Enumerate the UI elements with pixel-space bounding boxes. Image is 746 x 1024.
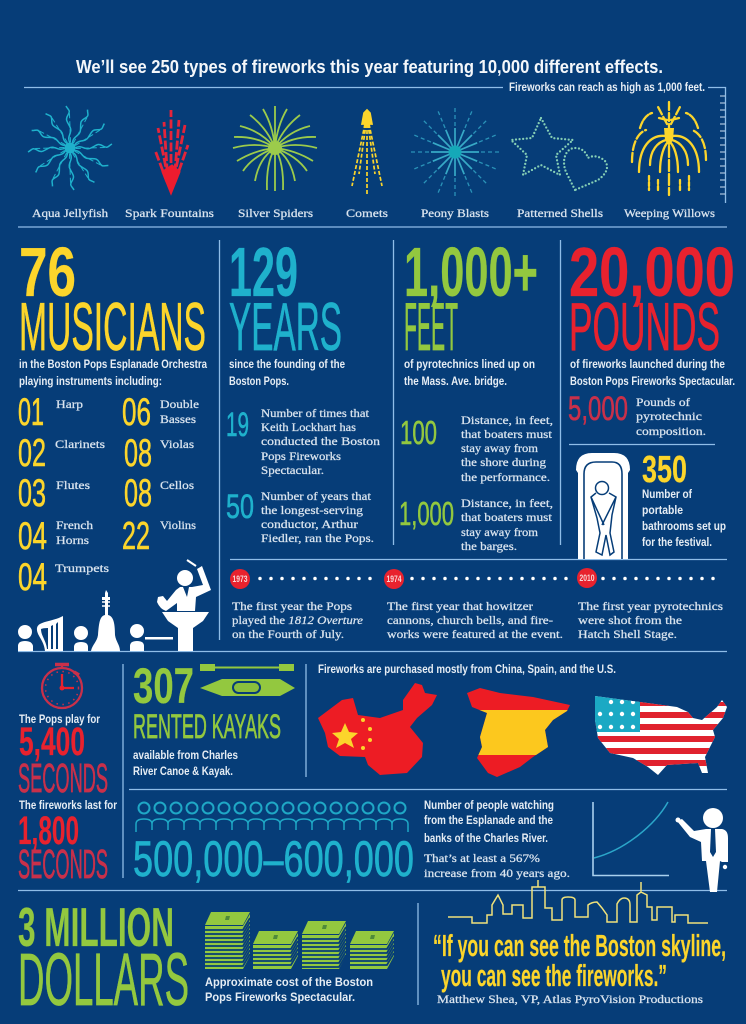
icon: spark fountain firework bbox=[155, 110, 188, 192]
height scale bbox=[24, 82, 726, 203]
instrument counts: 08 bbox=[124, 432, 152, 475]
panel: seconds: The Pops play for bbox=[19, 714, 100, 726]
panel: cost bbox=[18, 896, 394, 1021]
text: SECONDS bbox=[18, 841, 108, 887]
firework captions: Comets bbox=[346, 206, 388, 220]
panel: years: 19 bbox=[226, 406, 249, 444]
panel: feet: the barges. bbox=[461, 539, 517, 553]
icon: Boston skyline bbox=[448, 880, 708, 923]
instrument counts: 08 bbox=[124, 472, 152, 515]
instrument names: Cellos bbox=[160, 478, 194, 492]
map: USA bbox=[595, 696, 727, 775]
panel: musicians: 76 bbox=[19, 233, 76, 311]
panel: years: Boston Pops. bbox=[229, 376, 289, 388]
instrument counts: 02 bbox=[18, 432, 46, 475]
crowd description: That’s at least a 567% bbox=[424, 851, 540, 865]
panel: pounds: Number of bbox=[642, 489, 692, 501]
panel: seconds: The fireworks last for bbox=[19, 800, 117, 812]
panel: years: YEARS bbox=[229, 289, 342, 365]
instrument counts bbox=[18, 391, 152, 599]
panel: countries bbox=[318, 664, 730, 780]
firework captions: Silver Spiders bbox=[238, 206, 313, 220]
map: China bbox=[318, 683, 437, 775]
title: We’ll see 250 types of fireworks this year featuring 10,000 different effects. bbox=[76, 56, 663, 77]
panel: seconds bbox=[18, 664, 117, 887]
panel: pounds: 5,000 bbox=[568, 390, 628, 428]
instrument counts: 04 bbox=[18, 556, 47, 599]
panel: feet: stay away from bbox=[461, 441, 539, 455]
instrument names: Horns bbox=[56, 533, 89, 547]
panel: kayaks: River Canoe & Kayak. bbox=[133, 766, 233, 778]
instrument names: Violins bbox=[160, 518, 196, 532]
panel: cost: Pops Fireworks Spectacular. bbox=[205, 992, 355, 1004]
panel: years: 129 bbox=[229, 233, 298, 311]
icon: patterned shells firework bbox=[511, 118, 607, 190]
instrument counts: 01 bbox=[18, 391, 44, 434]
height scale: Fireworks can reach as high as 1,000 feet. bbox=[509, 82, 705, 94]
panel: years: Number of years that bbox=[261, 489, 372, 503]
panel: years: Spectacular. bbox=[261, 463, 324, 477]
panel: feet: 100 bbox=[400, 414, 437, 451]
panel: seconds: 1,800 bbox=[18, 809, 79, 853]
panel: feet: stay away from bbox=[461, 525, 539, 539]
panel: feet: that boaters must bbox=[461, 427, 553, 441]
panel: kayaks: available from Charles bbox=[133, 750, 238, 762]
text: MUSICIANS bbox=[19, 289, 206, 365]
panel: years: Fiedler, ran the Pops. bbox=[261, 531, 374, 545]
panel: kayaks bbox=[133, 658, 295, 778]
icon: crowd bbox=[136, 802, 408, 832]
crowd description bbox=[424, 800, 570, 880]
instrument counts: 22 bbox=[122, 515, 150, 558]
instrument names: Flutes bbox=[56, 478, 90, 492]
timeline: played the 1812 Overture bbox=[232, 613, 364, 627]
instrument counts: 06 bbox=[122, 391, 151, 434]
firework captions: Weeping Willows bbox=[624, 206, 715, 220]
instrument counts: 04 bbox=[18, 515, 47, 558]
panel: years: conductor, Arthur bbox=[261, 517, 358, 531]
panel: kayaks: 307 bbox=[133, 658, 194, 714]
panel: seconds: 5,400 bbox=[19, 720, 85, 764]
firework captions bbox=[32, 206, 715, 220]
panel: musicians: in the Boston Pops Esplanade Orchestra bbox=[19, 359, 208, 371]
crowd description: from the Esplanade and the bbox=[424, 815, 553, 827]
panel: musicians: playing instruments including: bbox=[19, 376, 162, 388]
panel: years: Keith Lockhart has bbox=[261, 420, 356, 434]
panel: pounds bbox=[568, 233, 735, 559]
panel: feet: Distance, in feet, bbox=[461, 496, 553, 510]
quote bbox=[433, 928, 726, 1006]
icon: comets firework bbox=[352, 110, 382, 195]
instrument names: Trumpets bbox=[55, 561, 109, 575]
icon: money stacks bbox=[205, 912, 394, 969]
panel: feet bbox=[399, 233, 553, 553]
panel: kayaks: RENTED KAYAKS bbox=[133, 708, 281, 746]
instrument names bbox=[55, 397, 199, 575]
instrument names: Violas bbox=[160, 437, 194, 451]
firework captions: Spark Fountains bbox=[125, 206, 214, 220]
panel: pounds: of fireworks launched during the bbox=[570, 359, 725, 371]
timeline: 1973 bbox=[232, 574, 248, 584]
panel: pounds: composition. bbox=[636, 424, 706, 438]
firework captions: Aqua Jellyfish bbox=[32, 206, 108, 220]
panel: years: conducted the Boston bbox=[261, 434, 380, 448]
firework captions: Peony Blasts bbox=[421, 206, 489, 220]
timeline bbox=[230, 568, 724, 641]
crowd description: Number of people watching bbox=[424, 800, 554, 812]
panel: years: 50 bbox=[226, 488, 254, 526]
panel: feet: the Mass. Ave. bridge. bbox=[404, 376, 507, 388]
crowd description: increase from 40 years ago. bbox=[424, 866, 570, 880]
timeline: works were featured at the event. bbox=[387, 627, 563, 641]
timeline: The first year the Pops bbox=[232, 599, 352, 613]
panel: pounds: pyrotechnic bbox=[636, 409, 702, 423]
instrument names: Harp bbox=[56, 397, 83, 411]
panel: feet: the shore during bbox=[461, 455, 546, 469]
panel: feet: 1,000+ bbox=[404, 233, 538, 311]
icon: orchestra and conductor bbox=[18, 560, 211, 651]
icon: kayak and paddle bbox=[200, 664, 295, 696]
map: Spain bbox=[467, 688, 570, 777]
panel: countries: Fireworks are purchased mostly from China, Spain, and the U.S. bbox=[318, 664, 616, 676]
icon: weeping willow firework bbox=[632, 100, 706, 195]
panel: feet: that boaters must bbox=[461, 510, 553, 524]
text: SECONDS bbox=[18, 755, 108, 801]
timeline: were shot from the bbox=[578, 613, 682, 627]
timeline: on the Fourth of July. bbox=[232, 627, 344, 641]
panel: pounds: Pounds of bbox=[636, 395, 690, 409]
panel: feet: FEET bbox=[404, 289, 458, 365]
panel: feet: of pyrotechnics lined up on bbox=[404, 359, 535, 371]
panel: pounds: 350 bbox=[642, 449, 687, 491]
instrument names: Double bbox=[160, 397, 199, 411]
panel: years: Pops Fireworks bbox=[261, 449, 341, 463]
panel: cost: DOLLARS bbox=[18, 938, 189, 1021]
timeline: The first year that howitzer bbox=[387, 599, 533, 613]
timeline: Hatch Shell Stage. bbox=[578, 627, 677, 641]
firework captions: Patterned Shells bbox=[517, 206, 603, 220]
timeline: The first year pyrotechnics bbox=[578, 599, 723, 613]
instrument names: Basses bbox=[160, 412, 196, 426]
crowd description: banks of the Charles River. bbox=[424, 833, 548, 845]
icon: portable bathroom bbox=[576, 453, 630, 559]
panel: feet: Distance, in feet, bbox=[461, 413, 553, 427]
panel: cost: Approximate cost of the Boston bbox=[205, 977, 373, 989]
instrument counts: 03 bbox=[18, 472, 46, 515]
icon: peony blast firework bbox=[411, 108, 499, 196]
timeline: cannons, church bells, and fire- bbox=[387, 613, 553, 627]
icon: presenter bbox=[676, 808, 728, 892]
panel: musicians bbox=[18, 233, 208, 599]
icon: silver spiders firework bbox=[233, 106, 317, 191]
panel: pounds: for the festival. bbox=[642, 537, 712, 549]
icon: aqua jellyfish firework bbox=[25, 103, 115, 193]
panel: pounds: bathrooms set up bbox=[642, 521, 726, 533]
icon: stopwatch bbox=[42, 664, 82, 708]
growth chart bbox=[593, 802, 669, 876]
timeline: 1974 bbox=[386, 574, 402, 584]
panel: feet: the performance. bbox=[461, 470, 550, 484]
panel: years: Number of times that bbox=[261, 406, 370, 420]
panel: feet: 1,000 bbox=[399, 495, 454, 532]
crowd figure: 500,000–600,000 bbox=[133, 831, 414, 887]
instrument names: French bbox=[56, 518, 93, 532]
quote: Matthew Shea, VP, Atlas PyroVision Productions bbox=[437, 992, 703, 1006]
instrument names: Clarinets bbox=[55, 437, 105, 451]
panel: years: the longest-serving bbox=[261, 503, 363, 517]
panel: years bbox=[226, 233, 380, 545]
panel: pounds: portable bbox=[642, 505, 683, 517]
panel: years: since the founding of the bbox=[229, 359, 345, 371]
timeline: 2010 bbox=[580, 573, 594, 583]
panel: cost: 3 MILLION bbox=[18, 896, 174, 958]
